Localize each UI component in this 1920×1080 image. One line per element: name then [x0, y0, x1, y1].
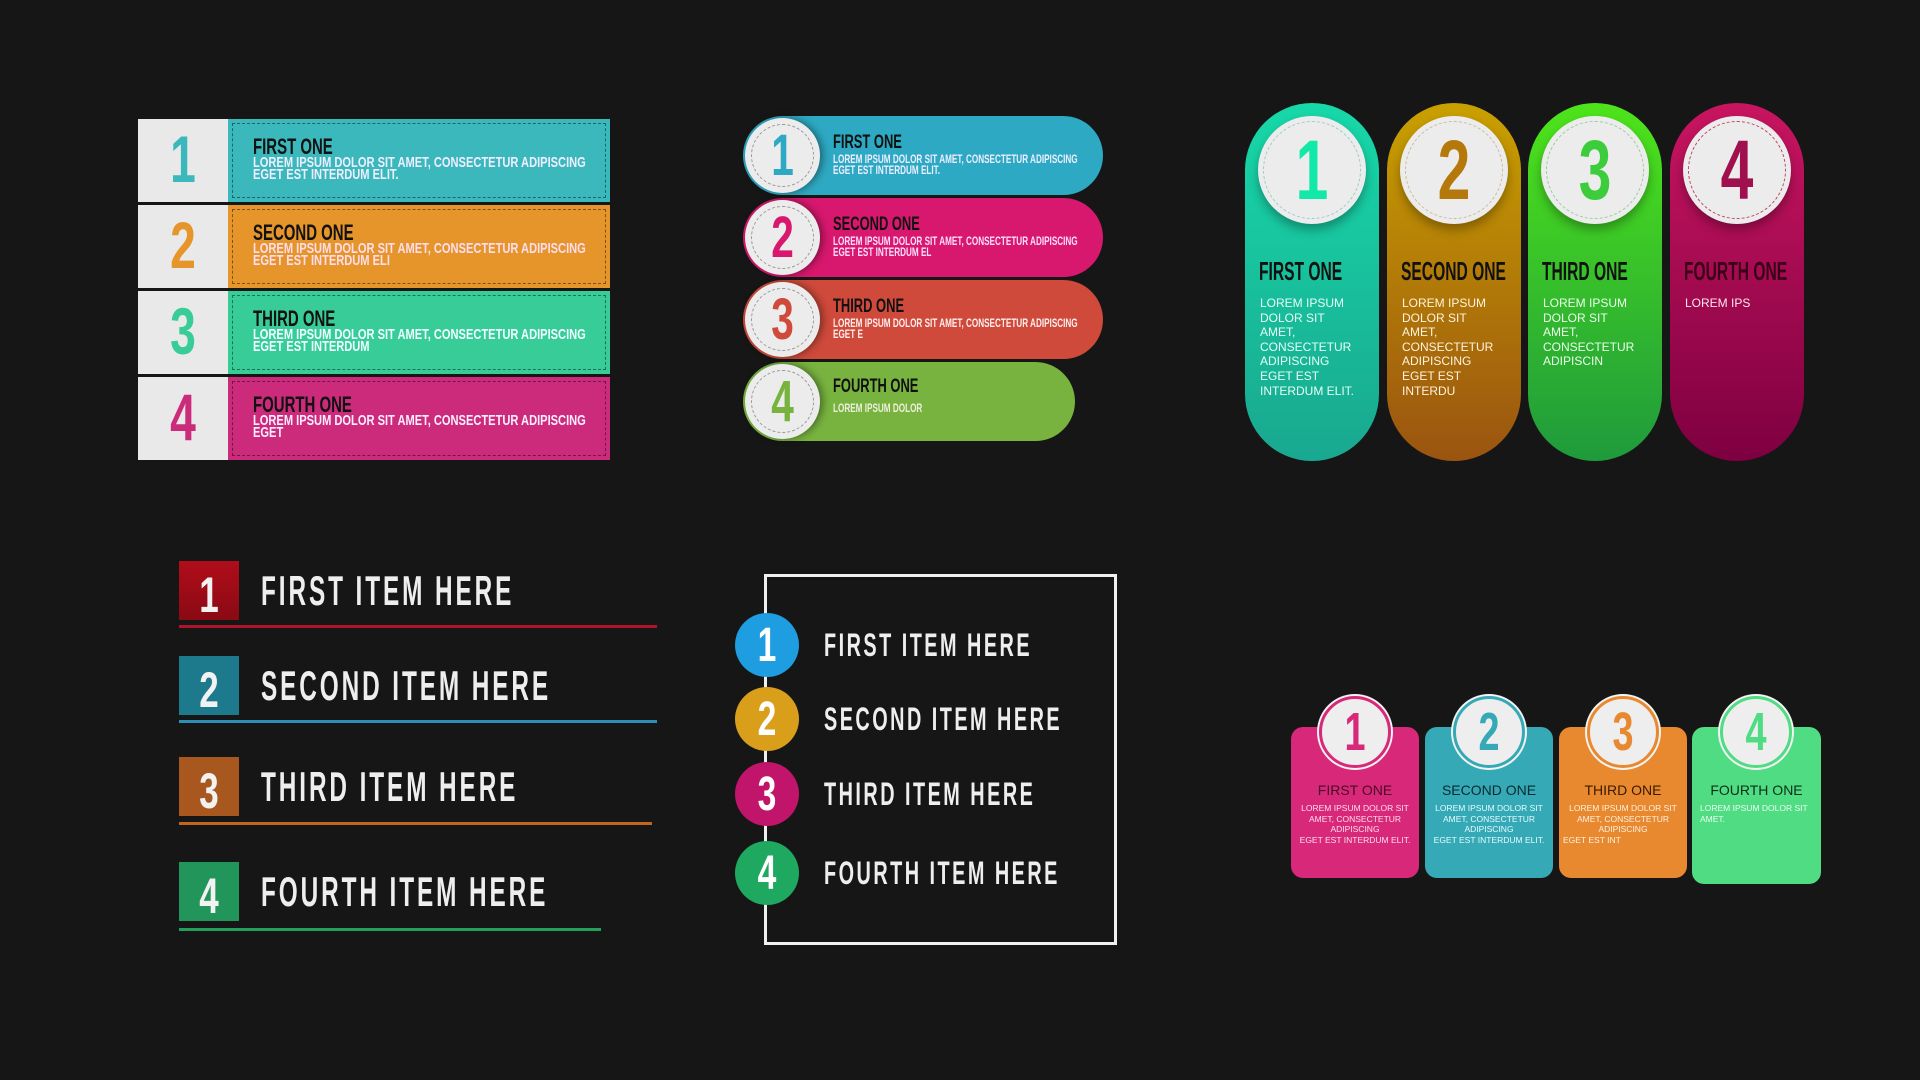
capsule 2: SECOND ONE [1401, 256, 1506, 286]
pill 2: 2 [771, 205, 794, 270]
row 4: LOREM IPSUM DOLOR SIT AMET, CONSECTETUR ADIPISCING [253, 412, 586, 429]
item 4: 4 [199, 868, 219, 924]
card 4: FOURTH ONE [1710, 782, 1803, 798]
card 4: 4 [1745, 702, 1767, 762]
pill 1: FIRST ONE [833, 132, 902, 153]
row 1: FIRST ONE [253, 134, 333, 159]
capsule 2: EGET EST [1402, 369, 1461, 383]
capsule 4: FOURTH ONE [1684, 256, 1787, 286]
capsule 2: CONSECTETUR [1402, 340, 1493, 354]
panel: pill list [743, 116, 1103, 441]
row 1 [138, 119, 610, 202]
pill 3: LOREM IPSUM DOLOR SIT AMET, CONSECTETUR ADIPISCING [833, 316, 1078, 330]
pill 2 [743, 198, 1103, 277]
circle item 1: FIRST ITEM HERE [824, 627, 1032, 663]
panel: numbered banner list [138, 119, 610, 460]
capsule 4: LOREM IPS [1685, 296, 1750, 310]
capsule 3: THIRD ONE [1542, 256, 1628, 286]
pill 1 [743, 116, 1103, 195]
card 4: LOREM IPSUM DOLOR SIT [1700, 803, 1808, 813]
card 1 [1291, 694, 1419, 878]
card 2: SECOND ONE [1442, 782, 1536, 798]
row 4: 4 [170, 380, 196, 454]
circle item 2: 2 [758, 693, 776, 746]
row 4 [138, 377, 610, 460]
pill 4 [743, 362, 1075, 441]
pill 1: 1 [771, 123, 794, 188]
pill 1: EGET EST INTERDUM ELIT. [833, 163, 940, 177]
circle item 2: SECOND ITEM HERE [824, 701, 1062, 737]
capsule 1: DOLOR SIT [1260, 311, 1325, 325]
row 4: FOURTH ONE [253, 392, 352, 417]
card 2 [1425, 694, 1553, 878]
row 2: LOREM IPSUM DOLOR SIT AMET, CONSECTETUR ADIPISCING [253, 240, 586, 257]
card 1: FIRST ONE [1318, 782, 1392, 798]
capsule 3: AMET, [1543, 325, 1578, 339]
capsule 1: CONSECTETUR [1260, 340, 1351, 354]
pill 3: 3 [771, 287, 794, 352]
capsule 2: INTERDU [1402, 384, 1455, 398]
card 4 [1692, 694, 1821, 884]
card 2: LOREM IPSUM DOLOR SIT AMET, CONSECTETUR ADIPISCING [1435, 803, 1543, 834]
item 4 [179, 862, 601, 931]
row 2: 2 [170, 208, 196, 282]
row 1: 1 [170, 122, 196, 196]
capsule 2: ADIPISCING [1402, 354, 1471, 368]
item 3: 3 [199, 763, 219, 819]
row 3: THIRD ONE [253, 306, 335, 331]
card 3: EGET EST INT [1563, 834, 1621, 844]
panel: cards with badges [1291, 694, 1821, 884]
capsule 1: AMET, [1260, 325, 1295, 339]
capsule 1: LOREM IPSUM [1260, 296, 1344, 310]
item 1 [179, 561, 657, 628]
row 3: 3 [170, 294, 196, 368]
capsule 2 [1387, 103, 1521, 461]
circle item 1 [735, 613, 1032, 677]
capsule 4 [1670, 103, 1804, 461]
pill 4: 4 [771, 369, 794, 434]
pill 2: LOREM IPSUM DOLOR SIT AMET, CONSECTETUR ADIPISCING [833, 234, 1078, 248]
card 1: EGET EST INTERDUM ELIT. [1300, 834, 1410, 844]
capsule 1: INTERDUM ELIT. [1260, 384, 1354, 398]
pill 1: LOREM IPSUM DOLOR SIT AMET, CONSECTETUR ADIPISCING [833, 152, 1078, 166]
row 3 [138, 291, 610, 374]
row 3: LOREM IPSUM DOLOR SIT AMET, CONSECTETUR ADIPISCING [253, 326, 586, 343]
item 2 [179, 656, 657, 723]
item 3: THIRD ITEM HERE [261, 763, 518, 810]
card 4: AMET. [1700, 814, 1725, 824]
card 3: THIRD ONE [1584, 782, 1662, 798]
capsule 3 [1528, 103, 1662, 461]
capsule 1: ADIPISCING [1260, 354, 1329, 368]
card 1: 1 [1344, 702, 1366, 762]
capsule 2: 2 [1438, 123, 1470, 217]
circle item 2 [735, 687, 1062, 751]
card 3: 3 [1612, 702, 1634, 762]
capsule 3: CONSECTETUR [1543, 340, 1634, 354]
circle item 4 [735, 841, 1060, 905]
item 1: FIRST ITEM HERE [261, 567, 514, 614]
pill 2: SECOND ONE [833, 214, 920, 235]
pill 3 [743, 280, 1103, 359]
panel: vertical capsules [1245, 103, 1804, 461]
panel: underlined item list [179, 561, 657, 931]
row 1: EGET EST INTERDUM ELIT. [253, 166, 399, 183]
capsule 1: FIRST ONE [1259, 256, 1342, 286]
capsule 1 [1245, 103, 1379, 461]
circle item 4: FOURTH ITEM HERE [824, 855, 1060, 891]
item 4: FOURTH ITEM HERE [261, 868, 548, 915]
pill 3: THIRD ONE [833, 296, 904, 317]
pill 2: EGET EST INTERDUM EL [833, 245, 931, 259]
card 1: LOREM IPSUM DOLOR SIT AMET, CONSECTETUR ADIPISCING [1301, 803, 1409, 834]
item 2: 2 [199, 662, 219, 718]
capsule 2: AMET, [1402, 325, 1437, 339]
card 2: 2 [1478, 702, 1500, 762]
capsule 3: 3 [1579, 123, 1611, 217]
row 4: EGET [253, 424, 283, 441]
capsule 2: DOLOR SIT [1402, 311, 1467, 325]
row 3: EGET EST INTERDUM [253, 338, 370, 355]
row 2: EGET EST INTERDUM ELI [253, 252, 390, 269]
capsule 3: DOLOR SIT [1543, 311, 1608, 325]
circle item 3: THIRD ITEM HERE [824, 776, 1035, 812]
pill 3: EGET E [833, 327, 863, 341]
row 2 [138, 205, 610, 288]
capsule 1: 1 [1296, 123, 1328, 217]
row 2: SECOND ONE [253, 220, 354, 245]
circle item 4: 4 [758, 847, 776, 900]
row 1: LOREM IPSUM DOLOR SIT AMET, CONSECTETUR ADIPISCING [253, 154, 586, 171]
item 3 [179, 757, 652, 825]
pill 4: LOREM IPSUM DOLOR [833, 401, 922, 415]
circle item 1: 1 [758, 619, 776, 672]
item 1: 1 [199, 567, 219, 623]
capsule 4: 4 [1721, 123, 1753, 217]
pill 4: FOURTH ONE [833, 376, 918, 397]
capsule 3: LOREM IPSUM [1543, 296, 1627, 310]
card 3: LOREM IPSUM DOLOR SIT AMET, CONSECTETUR ADIPISCING [1569, 803, 1677, 834]
circle item 3: 3 [758, 768, 776, 821]
card 3 [1559, 694, 1687, 878]
panel: framed circle list [735, 574, 1117, 945]
item 2: SECOND ITEM HERE [261, 662, 551, 709]
capsule 3: ADIPISCIN [1543, 354, 1603, 368]
capsule 1: EGET EST [1260, 369, 1319, 383]
card 2: EGET EST INTERDUM ELIT. [1434, 834, 1544, 844]
capsule 2: LOREM IPSUM [1402, 296, 1486, 310]
circle item 3 [735, 762, 1035, 826]
